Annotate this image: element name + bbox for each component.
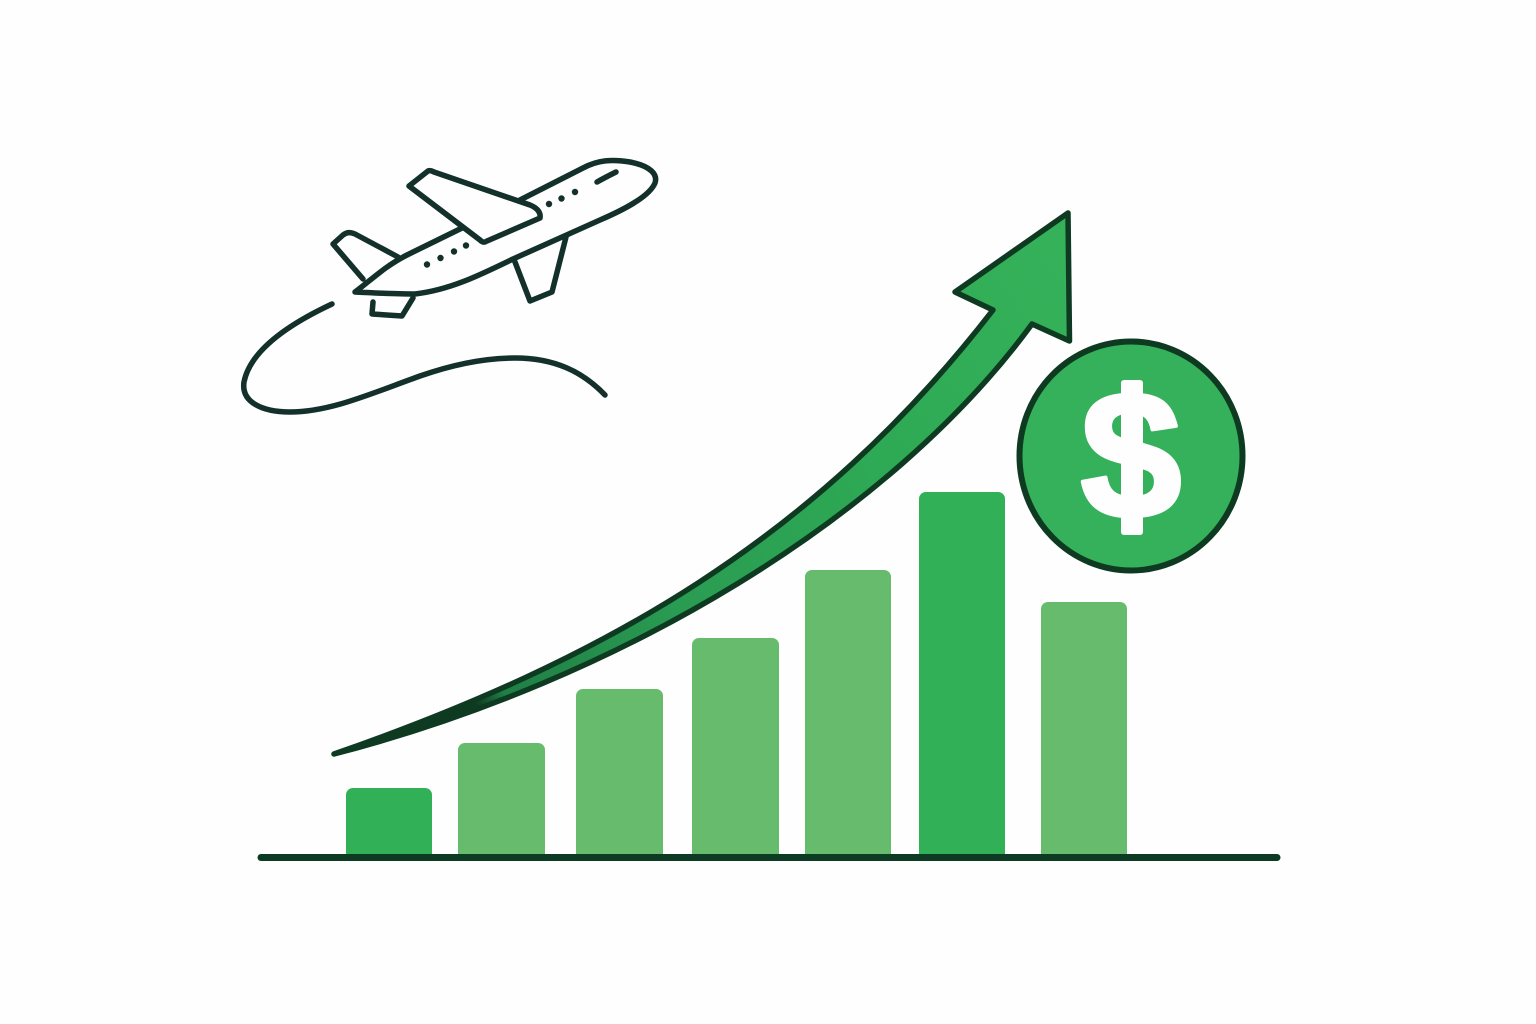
dollar sign: $ bbox=[1080, 353, 1182, 557]
bar chart bbox=[346, 492, 1127, 856]
dollar coin bbox=[1020, 342, 1242, 570]
cabin windows bbox=[424, 189, 578, 268]
bar 7 bbox=[1041, 602, 1127, 856]
coin disc bbox=[1020, 342, 1242, 570]
growth arrow bbox=[334, 213, 1070, 754]
bar 6 bbox=[919, 492, 1005, 856]
chart baseline bbox=[261, 854, 1277, 861]
lower wing bbox=[515, 237, 566, 301]
bar 3 bbox=[576, 689, 663, 856]
bar 5 bbox=[805, 570, 891, 856]
flight trail bbox=[244, 304, 605, 412]
tail fin bbox=[333, 233, 398, 279]
upper wing bbox=[409, 171, 540, 242]
landing gear bbox=[372, 298, 413, 316]
fuselage bbox=[355, 160, 656, 294]
bar 1 bbox=[346, 788, 432, 856]
airplane bbox=[333, 160, 656, 316]
cockpit window bbox=[597, 172, 616, 182]
bar 4 bbox=[692, 638, 779, 856]
bar 2 bbox=[458, 743, 545, 856]
